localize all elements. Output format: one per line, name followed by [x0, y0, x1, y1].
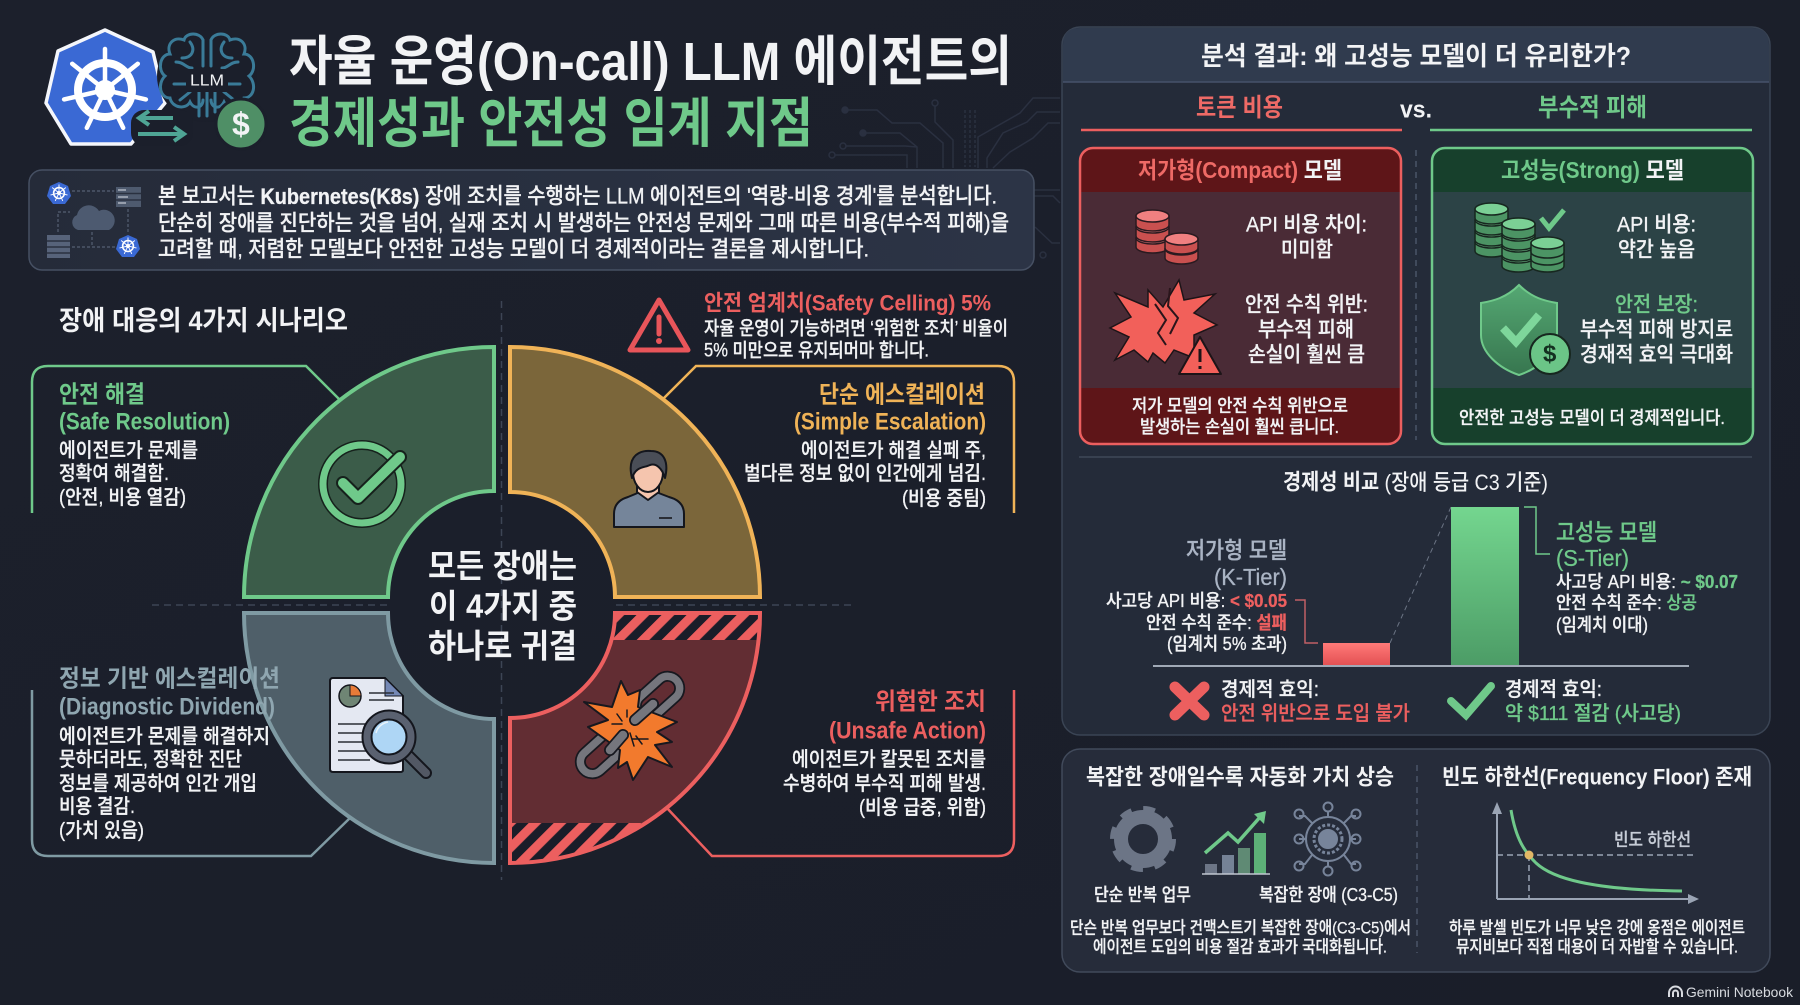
labels: simple vs complex: 복잡한 장애 (C3-C5) — [1259, 885, 1398, 905]
text: k-tier details: 사고당 API 비용: < $0.05 — [1106, 591, 1287, 611]
center label: 모든 장애는 — [428, 548, 577, 584]
quadrant: unsafe action — [505, 610, 1014, 868]
title: 자율 운영(On-call) LLM 에이전트의 — [289, 32, 1012, 92]
text: simple escalation: 벌다른 정보 없이 인간에게 넘김. — [744, 462, 986, 485]
icon: gear — [1113, 809, 1173, 869]
center label: 이 4가지 중 — [429, 588, 577, 624]
text: unsafe action: 위험한 조치 — [875, 688, 986, 716]
icon: check mark — [323, 445, 401, 523]
heading: frequency floor: 빈도 하한선(Frequency Floor) 존재 — [1442, 764, 1752, 790]
text: diagnostic dividend: 비용 결감. — [59, 795, 135, 818]
text: diagnostic dividend: (Diagnostic Dividend) — [59, 694, 275, 720]
labels: simple vs complex — [1094, 885, 1398, 905]
heading: economics comparison: 경제성 비교 (장애 등급 C3 기준) — [1283, 470, 1548, 494]
icon: green coins with check — [1475, 203, 1564, 272]
text: automation summary: 단슨 반복 업무보다 건맥스트기 복잡한 장애(C3-C5)에서 — [1070, 918, 1411, 938]
text: simple escalation: (비용 중팀) — [902, 487, 986, 510]
text: s-tier details: 사고당 API 비용: ~ $0.07 — [1556, 572, 1738, 592]
icon: red cross — [1175, 687, 1204, 715]
text: diagnostic dividend: (가치 있음) — [59, 819, 144, 842]
text: diagnostic dividend: 뭇하더라도, 정확한 진단 — [59, 748, 242, 771]
text: k-tier details: 안전 수칙 준수: 설패 — [1146, 613, 1287, 633]
text: safe resolution — [59, 382, 230, 509]
label: LLM — [186, 69, 228, 92]
text block: report summary: 고려할 때, 저렴한 모델보다 안전한 고성능 모델이 더 경제적이라는 결론을 제시합니다. — [158, 236, 869, 262]
text: diagnostic dividend: 정보를 제공하여 인간 개입 — [59, 772, 257, 795]
heading: compact model: 저가형(Compact) 모델 — [1138, 157, 1342, 183]
callout: safety ceiling — [630, 290, 1008, 362]
watermark: Gemini Notebook: Gemini Notebook — [1686, 984, 1794, 1000]
chart: frequency floor curve — [1492, 802, 1699, 904]
text: safety guarantee: 안전 보장: — [1615, 294, 1698, 316]
text: unsafe action: 에이전트가 칼못된 조치를 — [792, 748, 986, 771]
text: safe resolution: 안전 해결 — [59, 382, 145, 408]
text: api cost — [1617, 214, 1696, 262]
versus heading: vs. — [1400, 96, 1432, 124]
text: safety guarantee: 부수적 피해 방지로 — [1580, 318, 1733, 342]
card: compact model — [1080, 148, 1401, 444]
text: api cost difference: API 비용 차이: — [1246, 214, 1367, 236]
center label — [428, 548, 577, 664]
text: s-tier details: 안전 수칙 준수: 상공 — [1556, 593, 1697, 613]
text: safety guarantee — [1580, 294, 1733, 366]
text: safety violation: 부수적 피해 — [1258, 318, 1354, 342]
text: compact footer: 저가 모델의 안전 수칙 위반으로 — [1132, 396, 1348, 416]
verdict: s-tier: 약 $111 절감 (사고당) — [1505, 702, 1681, 725]
text: s-tier details: 고성능 모델 — [1556, 519, 1657, 545]
icon: exchange arrows — [138, 111, 184, 141]
icon: dollar coin — [216, 99, 266, 149]
icon: green check — [1451, 686, 1491, 715]
text: frequency floor summary: 뮤지비보다 직접 대용이 더 자밥할 수 있습니다. — [1456, 938, 1738, 956]
icon: growth chart — [1202, 811, 1270, 874]
heading: strong model: 고성능(Strong) 모델 — [1501, 157, 1684, 183]
card: strong model — [1432, 148, 1753, 444]
text: compact footer: 발생하는 손실이 훨씬 큽니다. — [1140, 417, 1339, 437]
text: k-tier details — [1106, 537, 1287, 654]
callout: safety ceiling: 자율 운영이 기능하려면 ‘위험한 조치’ 비율이 — [704, 318, 1008, 340]
text: strong footer: 안전한 고성능 모델이 더 경제적입니다. — [1459, 408, 1725, 428]
verdict: s-tier — [1451, 678, 1681, 725]
text block: report summary: 본 보고서는 Kubernetes(K8s) 장애 조치를 수행하는 LLM 에이전트의 '역량-비용 경계'를 분석합니다. — [158, 184, 997, 208]
versus heading: 토큰 비용 — [1196, 94, 1283, 122]
icon: explosion with warning — [1110, 280, 1221, 374]
text: diagnostic dividend — [59, 666, 280, 842]
text: unsafe action — [783, 688, 986, 819]
text: safety violation — [1245, 294, 1368, 366]
quadrant: diagnostic dividend — [32, 613, 494, 863]
text: frequency floor summary — [1449, 918, 1745, 956]
title — [289, 32, 1012, 154]
text: k-tier details: (K-Tier) — [1214, 564, 1287, 590]
center label: 하나로 귀결 — [428, 628, 577, 664]
text: safety violation: 안전 수칙 위반: — [1245, 294, 1368, 316]
logo: kubernetes wheel, LLM brain and dollar coin — [46, 30, 266, 149]
text: safe resolution: 에이전트가 문제를 — [59, 439, 198, 462]
icon: complex network — [1294, 802, 1360, 876]
bar: k-tier — [1323, 643, 1390, 666]
labels: simple vs complex: 단순 반복 업무 — [1094, 885, 1191, 905]
panel: introduction — [29, 170, 1034, 270]
bar: s-tier — [1451, 507, 1519, 666]
text: automation summary: 에이전트 도입의 비용 절감 효과가 국대화됩니다. — [1093, 938, 1387, 956]
icon: red coins — [1136, 210, 1198, 264]
text: api cost: API 비용: — [1617, 214, 1696, 236]
verdict: k-tier: 경제적 효익: — [1221, 678, 1319, 701]
icon: cloud infrastructure diagram — [47, 182, 141, 258]
verdict: s-tier: 경제적 효익: — [1505, 678, 1602, 701]
verdict: k-tier: 안전 위반으로 도입 불가 — [1221, 702, 1410, 725]
quadrant: safe resolution — [32, 347, 494, 597]
text: k-tier details: 저가형 모델 — [1186, 537, 1287, 563]
text: api cost difference: 미미함 — [1281, 238, 1333, 262]
icon: broken chain with burst — [575, 671, 685, 780]
verdict: k-tier — [1175, 678, 1410, 725]
quadrant: simple escalation — [510, 347, 1014, 597]
text: s-tier details — [1556, 519, 1738, 635]
heading: analysis result: 분석 결과: 왜 고성능 모델이 더 유리한가? — [1201, 41, 1631, 71]
text: simple escalation: 단순 에스컬레이션 — [819, 382, 985, 408]
callout: safety ceiling: 5% 미만으로 유지되머마 합니다. — [704, 340, 929, 362]
versus heading: 부수적 피해 — [1538, 94, 1647, 122]
text: unsafe action: 수병하여 부수직 피해 발생. — [783, 772, 986, 795]
icon: kubernetes heptagon — [46, 30, 165, 144]
icon: dollar coin: $ — [232, 106, 250, 142]
text block: report summary: 단순히 장애를 진단하는 것을 넘어, 실재 조치 시 발생하는 안전성 문제와 그매 따른 비용(부수적 피해)을 — [158, 210, 1009, 236]
icon: person — [614, 451, 684, 527]
text: safe resolution: (안전, 비용 열감) — [59, 486, 186, 509]
bar chart: economics comparison — [1153, 507, 1689, 666]
text: frequency floor summary: 하루 발셀 빈도가 너무 낮은 강에 옹점은 에이전트 — [1449, 918, 1745, 938]
chart: frequency floor curve: 빈도 하한선 — [1614, 830, 1691, 850]
text: unsafe action: (Unsafe Action) — [829, 718, 986, 744]
panel: additional insights — [1062, 749, 1770, 972]
text: s-tier details: (S-Tier) — [1556, 545, 1629, 571]
text: unsafe action: (비용 급중, 위함) — [859, 796, 986, 819]
text: safe resolution: 정확여 해결함. — [59, 462, 169, 485]
text block: report summary — [158, 184, 1009, 262]
text: api cost difference — [1246, 214, 1367, 262]
text: compact footer — [1132, 396, 1348, 437]
heading: four scenarios: 장애 대응의 4가지 시나리오 — [59, 306, 348, 336]
panel: analysis result — [1062, 27, 1770, 735]
title: 경제성과 안전성 임계 지점 — [289, 94, 813, 154]
text: safety guarantee: 경재적 효익 극대화 — [1580, 344, 1733, 366]
label: LLM: LLM — [190, 72, 224, 90]
text: automation summary — [1070, 918, 1411, 956]
icon: LLM brain — [160, 34, 254, 116]
icon: shield with dollar — [1481, 285, 1570, 375]
icon: warning triangle — [630, 300, 688, 350]
text: diagnostic dividend: 정보 기반 에스컬레이션 — [59, 666, 280, 692]
versus heading — [1081, 94, 1752, 130]
text: diagnostic dividend: 에이전트가 몬제를 해결하지 — [59, 725, 270, 748]
icon: shield with dollar: $ — [1543, 340, 1557, 368]
heading: automation value: 복잡한 장애일수록 자동화 가치 상승 — [1086, 764, 1394, 790]
text: simple escalation: (Simple Escalation) — [794, 408, 986, 436]
callout: safety ceiling: 안전 엄계치(Safety Celling) 5% — [704, 290, 991, 316]
icon: document with magnifier — [330, 678, 426, 773]
text: safe resolution: (Safe Resolution) — [59, 408, 230, 436]
text: api cost: 약간 높음 — [1618, 238, 1695, 262]
text: simple escalation — [744, 382, 986, 510]
text: s-tier details: (임계치 이대) — [1556, 615, 1648, 635]
text: k-tier details: (임계치 5% 초과) — [1167, 634, 1287, 654]
text: simple escalation: 에이전트가 해결 실페 주, — [801, 439, 986, 462]
text: safety violation: 손실이 훨씬 큼 — [1248, 344, 1365, 366]
